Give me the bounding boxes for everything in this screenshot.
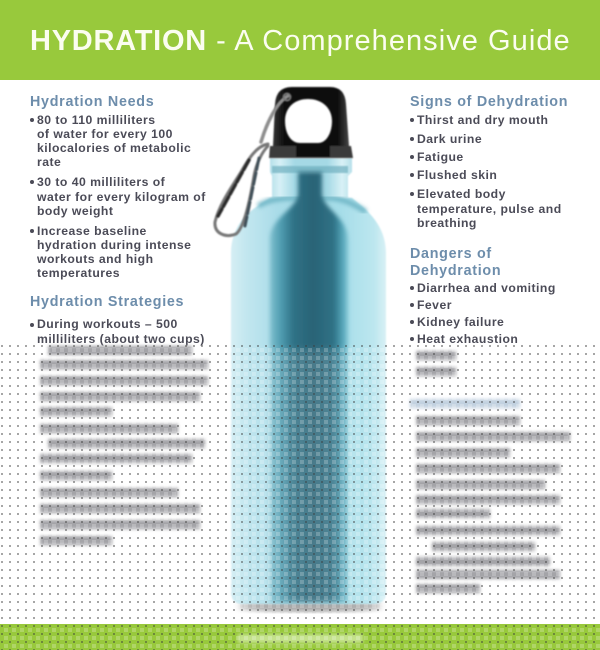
list: dangers of dehydration: Heat exhaustion (417, 332, 518, 346)
carabiner clip (215, 94, 290, 236)
heading: hydration strategies: Hydration Strategies (30, 294, 184, 310)
list: signs of dehydration: Elevated body (417, 187, 506, 201)
collar shade (272, 166, 348, 173)
list: hydration needs: temperatures (37, 266, 120, 280)
list: hydration needs: 30 to 40 milliliters of (37, 175, 165, 189)
dark reflection band (270, 172, 348, 602)
list: signs of dehydration: breathing (417, 216, 477, 230)
heading: dangers of dehydration: Dehydration (410, 263, 501, 279)
heading: hydration needs: Hydration Needs (30, 94, 154, 110)
footer band (0, 624, 600, 650)
list: dangers of dehydration: Kidney failure (417, 315, 504, 329)
list: signs of dehydration: Dark urine (417, 132, 482, 146)
heading: dangers of dehydration (410, 246, 501, 279)
list: hydration needs: water for every kilogram of (37, 190, 206, 204)
list: dangers of dehydration: Diarrhea and vomiting (417, 281, 556, 295)
list: hydration needs: of water for every 100 (37, 127, 173, 141)
list: hydration needs: workouts and high (37, 252, 154, 266)
list: hydration strategies: During workouts – 500 (37, 317, 178, 331)
heading: signs of dehydration: Signs of Dehydration (410, 94, 568, 110)
panel: signs of dehydration (410, 94, 568, 230)
bottle body (231, 198, 386, 604)
list: hydration needs: body weight (37, 204, 113, 218)
panel: hydration strategies (30, 294, 205, 346)
list: signs of dehydration: Thirst and dry mouth (417, 113, 548, 127)
list: signs of dehydration: Flushed skin (417, 168, 497, 182)
title: HYDRATION - A Comprehensive Guide (30, 25, 571, 57)
list: dangers of dehydration (410, 281, 556, 346)
list: signs of dehydration: temperature, pulse and (417, 202, 562, 216)
list: hydration needs: hydration during intense (37, 238, 191, 252)
list: hydration needs: rate (37, 155, 61, 169)
list: hydration needs (30, 113, 206, 280)
list: hydration strategies: milliliters (about two cups) (37, 332, 205, 346)
list: signs of dehydration: Fatigue (417, 150, 464, 164)
list: hydration needs: 80 to 110 milliliters (37, 113, 155, 127)
panel: hydration needs (30, 94, 206, 280)
bottle shadow (238, 600, 382, 612)
header banner (0, 0, 600, 80)
list: hydration strategies (30, 317, 205, 346)
list: hydration needs: Increase baseline (37, 224, 147, 238)
list: hydration needs: kilocalories of metabolic (37, 141, 191, 155)
footer credit (blurred) (238, 634, 363, 643)
dot screen overlay (1, 345, 600, 650)
panel: dangers of dehydration (410, 246, 556, 346)
list: dangers of dehydration: Fever (417, 298, 452, 312)
bottle neck (270, 158, 352, 198)
heading: dangers of dehydration: Dangers of (410, 246, 492, 262)
bottle cap (269, 87, 353, 158)
shoulder ring (258, 198, 366, 212)
list: signs of dehydration (410, 113, 562, 230)
lower bottle fade (262, 350, 356, 604)
